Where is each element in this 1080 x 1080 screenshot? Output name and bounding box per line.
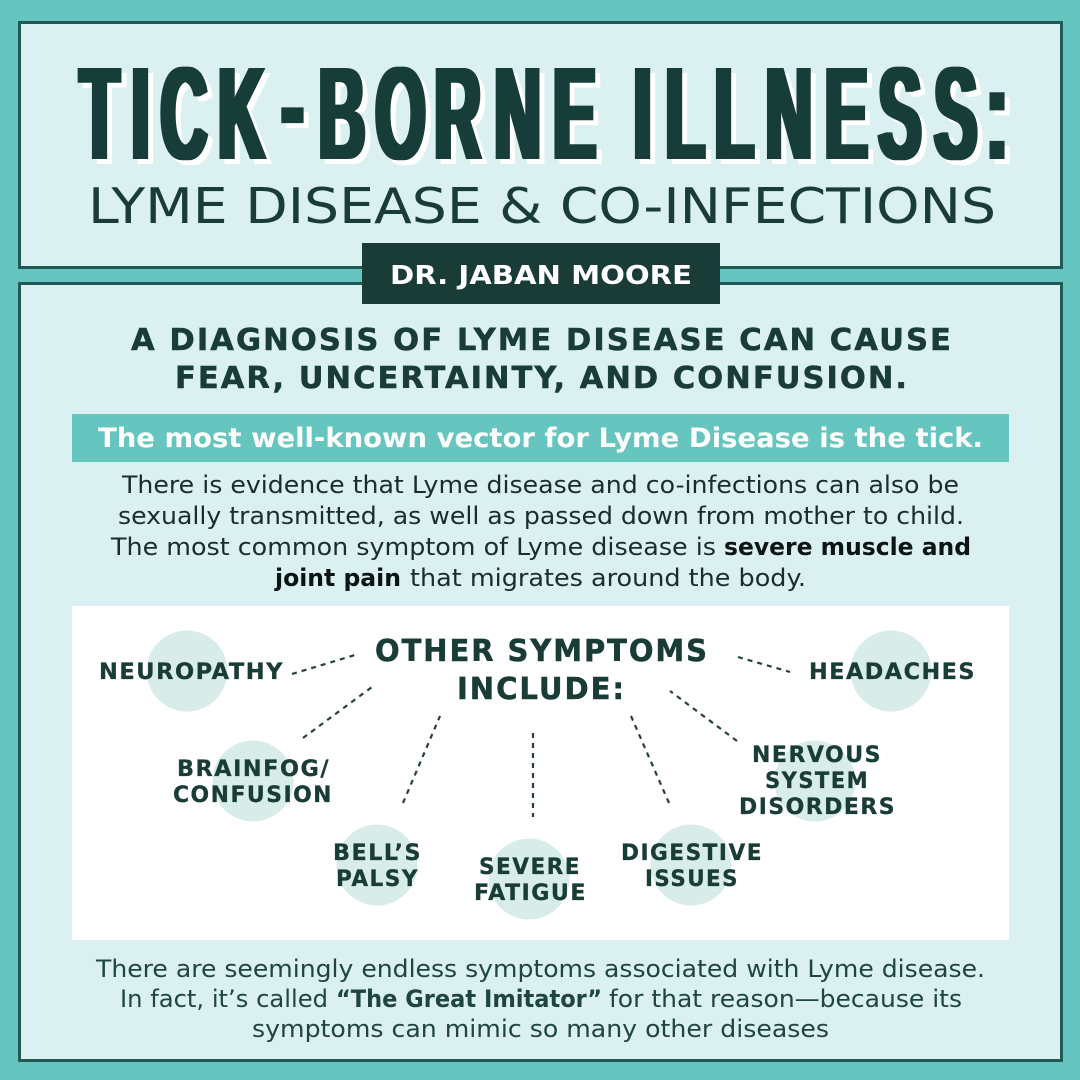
closing paragraph: “The Great Imitator”	[336, 985, 602, 1013]
label: bell's palsy: BELL’S	[333, 841, 422, 866]
label: digestive issues	[621, 841, 763, 892]
headline	[131, 323, 953, 396]
highlighted banner	[72, 414, 1009, 462]
headline: A DIAGNOSIS OF LYME DISEASE CAN CAUSE	[131, 323, 953, 358]
closing paragraph: In fact, it’s called	[120, 985, 328, 1013]
heading: other symptoms: OTHER SYMPTOMS	[375, 634, 709, 669]
closing paragraph	[95, 955, 985, 1043]
label: severe fatigue	[474, 855, 587, 906]
intro paragraph: that migrates around the body.	[410, 564, 806, 592]
label: severe fatigue: SEVERE	[479, 855, 581, 880]
label: bell's palsy: PALSY	[336, 867, 419, 892]
closing paragraph: symptoms can mimic so many other diseases	[252, 1015, 829, 1043]
author badge: DR. JABAN MOORE	[390, 261, 692, 291]
headline: FEAR, UNCERTAINTY, AND CONFUSION.	[175, 361, 909, 396]
highlighted banner: The most well-known vector for Lyme Disease is the tick.	[98, 423, 983, 454]
label: neuropathy: NEUROPATHY	[99, 660, 284, 685]
label: nervous system disorders	[739, 743, 896, 820]
label: brainfog	[173, 757, 333, 808]
intro paragraph: severe muscle and	[724, 533, 971, 561]
title: TICK-BORNE ILLNESS:	[85, 36, 1013, 193]
intro paragraph: The most common symptom of Lyme disease is	[110, 533, 716, 561]
heading: other symptoms	[375, 634, 709, 707]
symptom circles	[146, 630, 932, 920]
intro paragraph: There is evidence that Lyme disease and co-infections can also be	[121, 471, 959, 499]
title: TICK-BORNE ILLNESS:	[80, 31, 1008, 188]
closing paragraph: There are seemingly endless symptoms associated with Lyme disease.	[95, 955, 985, 983]
heading: other symptoms: INCLUDE:	[457, 672, 626, 707]
label: severe fatigue: FATIGUE	[474, 881, 587, 906]
intro paragraph	[110, 471, 971, 592]
intro paragraph: sexually transmitted, as well as passed down from mother to child.	[118, 502, 964, 530]
author badge	[362, 243, 720, 304]
label: digestive issues: ISSUES	[645, 867, 739, 892]
intro paragraph: joint pain	[274, 564, 401, 592]
label: brainfog: CONFUSION	[173, 783, 333, 808]
panel: header	[20, 22, 1062, 268]
panel: main content	[20, 284, 1062, 1060]
label: nervous system disorders: NERVOUS	[752, 743, 882, 768]
label: nervous system disorders: SYSTEM	[765, 769, 869, 794]
label: nervous system disorders: DISORDERS	[739, 795, 896, 820]
label: bell's palsy	[333, 841, 422, 892]
panel: other symptoms	[72, 606, 1009, 940]
label: brainfog: BRAINFOG/	[177, 757, 330, 782]
closing paragraph: for that reason—because its	[609, 985, 962, 1013]
label: headaches: HEADACHES	[809, 660, 976, 685]
dashed connector lines	[292, 655, 790, 817]
label: digestive issues: DIGESTIVE	[621, 841, 763, 866]
subtitle: LYME DISEASE & CO-INFECTIONS	[88, 178, 996, 235]
